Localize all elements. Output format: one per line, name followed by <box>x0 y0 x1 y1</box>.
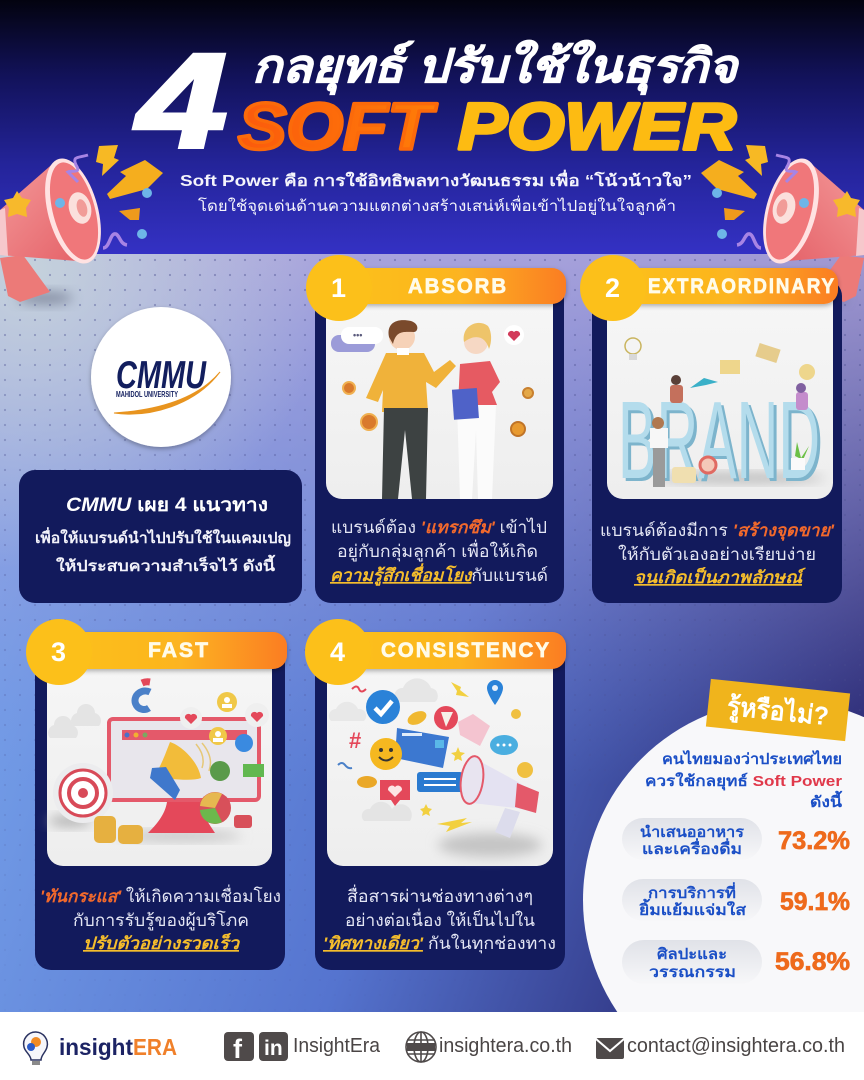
logo: insightERA: ERA <box>133 1034 177 1060</box>
panel: 3 fast <box>35 645 285 970</box>
text: survey intro: ดังนี้ <box>810 790 843 811</box>
panel: introduction: เพื่อให้แบรนด์นำไปปรับใช้ในแคมเปญ <box>35 527 291 547</box>
header band <box>0 0 864 254</box>
stat: food and drink: นำเสนออาหาร <box>640 824 745 841</box>
banner: 4 CONSISTENCY: 4 <box>330 637 345 667</box>
badge: did you know: รู้หรือไม่? <box>725 690 830 733</box>
text: fast description: 'ทันกระแส' ให้เกิดความเชื่อมโยง <box>40 884 281 906</box>
contact: social media: InsightEra <box>293 1035 381 1057</box>
text: extraordinary description: ให้กับตัวเองอย่างเรียบง่าย <box>618 544 816 564</box>
stat: arts and culture: 56.8% <box>775 948 850 976</box>
subtitle: โดยใช้จุดเด่นด้านความแตกต่างสร้างเสน่ห์เพื่อเข้าไปอยู่ในใจลูกค้า <box>198 195 676 216</box>
banner: 4 CONSISTENCY <box>305 619 566 685</box>
illustration: two people talking: ••• <box>353 330 362 340</box>
logo: insightERA: insight <box>59 1034 133 1060</box>
title line 2: SOFT POWER: SOFT <box>238 89 437 163</box>
footer <box>0 1012 864 1080</box>
text: consistency description: 'ทิศทางเดียว' กันในทุกช่องทาง <box>323 933 556 954</box>
text: survey intro <box>645 749 843 811</box>
contact: social media: f <box>233 1034 243 1064</box>
contact: social media: in <box>264 1037 283 1060</box>
stat: food and drink <box>622 818 850 860</box>
title number 4: 4 <box>133 27 227 176</box>
badge: did you know <box>706 679 850 741</box>
banner: 3 FAST: FAST <box>148 639 210 662</box>
banner: 2 EXTRAORDINARY: EXTRAORDINARY <box>648 275 836 298</box>
stat: arts and culture: ศิลปะและ <box>657 945 727 963</box>
text: fast description <box>40 884 281 953</box>
illustration: social media icons and megaphone <box>327 660 553 866</box>
stat: service: การบริการที่ <box>648 882 736 902</box>
icon: left megaphone <box>0 145 163 304</box>
title line 2: SOFT POWER: POWER <box>458 89 736 163</box>
text: survey intro: คนไทยมองว่าประเทศไทย <box>662 749 842 768</box>
contact: email: contact@insightera.co.th <box>627 1035 845 1057</box>
banner: 1 ABSORB <box>306 255 566 321</box>
stat: food and drink: 73.2% <box>778 827 850 855</box>
stat: arts and culture <box>622 940 850 984</box>
text: survey intro: ควรใช้กลยุทธ์ Soft Power <box>645 772 842 791</box>
stat: service <box>622 879 850 921</box>
logo: insightERA <box>24 1032 177 1065</box>
text: extraordinary description: แบรนด์ต้องมีการ 'สร้างจุดขาย' <box>600 521 835 541</box>
text: fast description: ปรับตัวอย่างรวดเร็ว <box>83 932 241 953</box>
CMMU logo: MAHIDOL UNIVERSITY <box>116 390 178 399</box>
banner: 1 ABSORB: 1 <box>331 273 346 303</box>
text: consistency description: สื่อสารผ่านช่องทางต่างๆ <box>347 884 533 906</box>
page background <box>0 254 864 1012</box>
panel: 1 absorb <box>315 280 564 603</box>
CMMU logo <box>91 307 231 447</box>
text: absorb description: ความรู้สึกเชื่อมโยงกับแบรนด์ <box>330 563 548 586</box>
subtitle <box>180 169 692 216</box>
stat: arts and culture: วรรณกรรม <box>649 964 736 981</box>
title line 2: SOFT POWER <box>238 89 736 163</box>
illustration: monitor and megaphone <box>47 660 272 866</box>
illustration: social media icons and megaphone: # <box>349 728 361 753</box>
subtitle: Soft Power คือ การใช้อิทธิพลทางวัฒนธรรม เพื่อ “โน้วน้าวใจ” <box>180 169 692 190</box>
text: fast description: กับการรับรู้ของผู้บริโภค <box>73 910 249 931</box>
contact: website <box>406 1032 572 1062</box>
contact: social media <box>224 1032 381 1064</box>
panel: introduction: ให้ประสบความสำเร็จไว้ ดังนี้ <box>56 554 276 575</box>
panel: 2 extraordinary <box>592 280 842 603</box>
CMMU logo: CMMU <box>116 354 207 397</box>
banner: 3 FAST: 3 <box>51 637 66 667</box>
text: absorb description <box>330 517 548 586</box>
panel: 4 consistency <box>315 645 565 970</box>
icon: right megaphone <box>701 145 864 304</box>
banner: 3 FAST <box>26 619 287 685</box>
stat: service: ยิ้มแย้มแจ่มใส <box>639 898 747 919</box>
text: extraordinary description <box>600 521 835 587</box>
panel: did you know <box>583 679 864 1080</box>
illustration: brand letters <box>607 296 833 505</box>
text: consistency description: อย่างต่อเนื่อง ให้เป็นไปใน <box>345 908 535 930</box>
banner: 2 EXTRAORDINARY: 2 <box>605 273 620 303</box>
text: extraordinary description: จนเกิดเป็นภาพลักษณ์ <box>634 566 806 587</box>
illustration: two people talking <box>326 296 553 499</box>
title line 1: กลยุทธ์ ปรับใช้ในธุรกิจ <box>252 39 740 95</box>
banner: 4 CONSISTENCY: CONSISTENCY <box>381 639 551 662</box>
banner: 1 ABSORB: ABSORB <box>408 275 508 298</box>
panel: introduction <box>19 470 302 603</box>
panel: introduction: CMMU เผย 4 แนวทาง <box>66 495 268 516</box>
banner: 2 EXTRAORDINARY <box>580 255 838 321</box>
stat: food and drink: และเครื่องดื่ม <box>642 838 742 858</box>
text: consistency description <box>323 884 556 954</box>
contact: website: insightera.co.th <box>439 1035 572 1057</box>
text: absorb description: อยู่กับกลุ่มลูกค้า เพื่อให้เกิด <box>337 539 538 562</box>
stat: service: 59.1% <box>780 888 850 916</box>
text: absorb description: แบรนด์ต้อง 'แทรกซึม' เข้าไป <box>331 517 547 537</box>
